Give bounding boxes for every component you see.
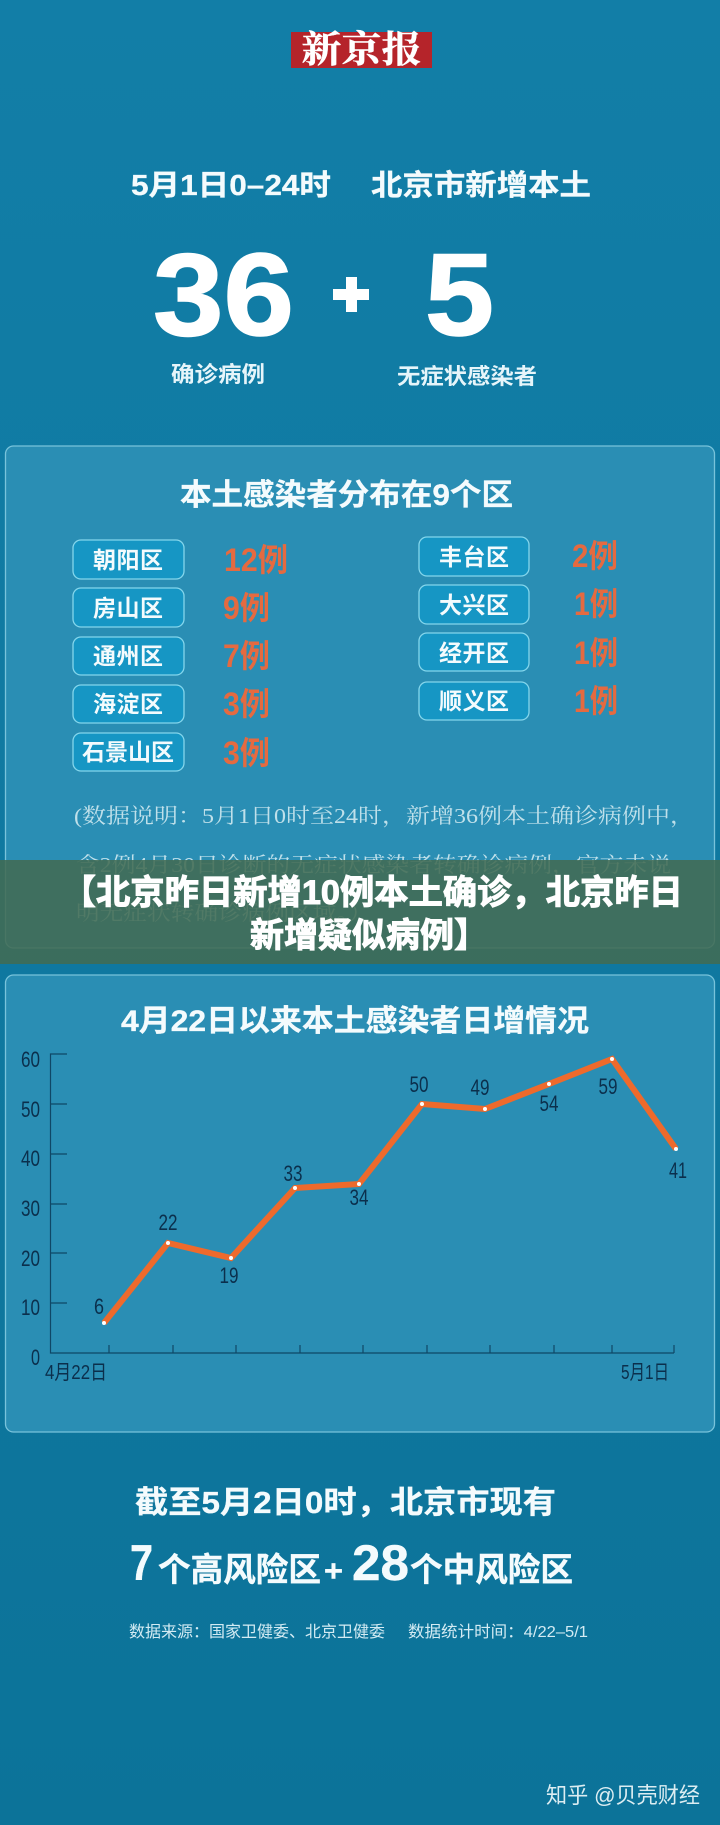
data note bbox=[74, 804, 694, 925]
banner headline: 【 bbox=[62, 874, 96, 912]
data labels: 22 bbox=[158, 1210, 178, 1235]
y axis labels: 10 bbox=[21, 1295, 40, 1320]
district: 大兴区 1例 bbox=[419, 585, 618, 624]
risk area counts: 个高风险区 bbox=[158, 1551, 321, 1588]
data labels: 33 bbox=[284, 1161, 302, 1186]
watermark: 知乎 @贝壳财经 bbox=[546, 1783, 700, 1808]
district: 顺义区 1例: 1例 bbox=[574, 683, 618, 719]
district: 海淀区 3例: 3例 bbox=[223, 686, 270, 722]
district: 朝阳区 12例: 12例 bbox=[224, 542, 288, 578]
district: 经开区 1例 bbox=[419, 633, 618, 671]
district: 石景山区 3例: 石景山区 bbox=[82, 739, 174, 765]
district: 海淀区 3例 bbox=[73, 685, 270, 723]
data point markers bbox=[102, 1057, 678, 1325]
y axis labels: 50 bbox=[21, 1097, 40, 1122]
data note: 含2例4月30日诊断的无症状感染者转确诊病例，官方未说 bbox=[76, 853, 671, 878]
district: 丰台区 2例: 丰台区 bbox=[439, 544, 509, 570]
y axis labels: 0 bbox=[31, 1345, 40, 1370]
panel heading: 本土感染者分布在9个区 bbox=[180, 479, 513, 512]
stat: 5 asymptomatic: 无症状感染者 bbox=[397, 364, 537, 389]
district: 石景山区 3例 bbox=[73, 733, 270, 771]
x axis labels: 4月22日 bbox=[45, 1362, 107, 1384]
chart axes bbox=[50, 1054, 674, 1353]
district: 通州区 7例 bbox=[73, 637, 270, 675]
banner headline: 北京昨日新增10例本土确诊，北京昨日 bbox=[96, 874, 683, 912]
heading: date and scope: 北京市新增本土 bbox=[371, 169, 591, 202]
heading: date and scope: 5月1日0–24时 bbox=[131, 169, 331, 202]
district: 丰台区 2例: 2例 bbox=[572, 538, 618, 574]
data labels: 50 bbox=[410, 1072, 428, 1097]
risk area counts: 个中风险区 bbox=[410, 1551, 573, 1588]
risk area counts bbox=[130, 1535, 573, 1591]
x axis labels: 5月1日 bbox=[621, 1362, 669, 1384]
panel: district distribution bbox=[6, 446, 714, 948]
risk area counts: 28 bbox=[352, 1535, 409, 1591]
district: 顺义区 1例: 顺义区 bbox=[439, 688, 509, 714]
data note: 明无症状转确诊病例区域。） bbox=[76, 901, 372, 925]
data labels: 6 bbox=[94, 1294, 104, 1319]
risk area counts: 7 bbox=[130, 1535, 153, 1591]
data labels: 59 bbox=[598, 1074, 618, 1099]
y axis labels: 20 bbox=[21, 1246, 40, 1271]
y axis labels: 60 bbox=[21, 1047, 40, 1072]
data labels bbox=[94, 1072, 687, 1319]
data note: (数据说明：5月1日0时至24时，新增36例本土确诊病例中， bbox=[74, 804, 694, 829]
y axis labels: 40 bbox=[21, 1146, 40, 1171]
district: 海淀区 3例: 海淀区 bbox=[93, 691, 163, 717]
risk area counts: + bbox=[324, 1555, 343, 1588]
data source bbox=[129, 1623, 588, 1641]
banner headline: 新增疑似病例】 bbox=[250, 917, 488, 955]
district: 经开区 1例: 1例 bbox=[574, 635, 618, 671]
data labels: 41 bbox=[669, 1158, 687, 1183]
district: 通州区 7例: 通州区 bbox=[93, 643, 163, 669]
stat: 5 asymptomatic: 5 bbox=[425, 229, 494, 360]
x axis labels bbox=[45, 1362, 669, 1384]
stat: 5 asymptomatic bbox=[397, 229, 537, 389]
stat: 36 confirmed cases: 36 bbox=[153, 229, 294, 360]
data labels: 34 bbox=[350, 1185, 368, 1210]
data source: 数据来源：国家卫健委、北京卫健委 bbox=[129, 1623, 385, 1641]
district: 顺义区 1例 bbox=[419, 682, 618, 720]
heading: date and scope bbox=[131, 169, 591, 202]
district: 房山区 9例 bbox=[73, 588, 270, 627]
overlay banner bbox=[0, 860, 720, 964]
y axis labels bbox=[21, 1047, 40, 1370]
district: 朝阳区 12例 bbox=[73, 540, 288, 579]
district: 大兴区 1例: 大兴区 bbox=[439, 592, 509, 618]
district: 通州区 7例: 7例 bbox=[223, 638, 270, 674]
banner headline bbox=[62, 874, 683, 955]
chart heading: 4月22日以来本土感染者日增情况 bbox=[121, 1005, 589, 1038]
district: 石景山区 3例: 3例 bbox=[223, 735, 270, 771]
plus sign bbox=[333, 277, 369, 312]
panel: daily increase chart bbox=[6, 975, 714, 1432]
heading: risk areas: 截至5月2日0时，北京市现有 bbox=[135, 1485, 556, 1520]
logo: 新京报: 新京报 bbox=[302, 29, 422, 71]
line series bbox=[104, 1059, 676, 1323]
district: 房山区 9例: 房山区 bbox=[93, 595, 163, 621]
district: 大兴区 1例: 1例 bbox=[574, 586, 618, 622]
district: 朝阳区 12例: 朝阳区 bbox=[93, 547, 163, 573]
data source: 数据统计时间：4/22–5/1 bbox=[408, 1623, 588, 1641]
data labels: 19 bbox=[220, 1263, 238, 1288]
district: 经开区 1例: 经开区 bbox=[439, 640, 509, 666]
district: 房山区 9例: 9例 bbox=[223, 590, 270, 626]
district: 丰台区 2例 bbox=[419, 537, 618, 576]
data labels: 49 bbox=[470, 1075, 490, 1100]
stat: 36 confirmed cases: 确诊病例 bbox=[171, 362, 265, 387]
data labels: 54 bbox=[540, 1091, 558, 1116]
y axis labels: 30 bbox=[21, 1196, 40, 1221]
